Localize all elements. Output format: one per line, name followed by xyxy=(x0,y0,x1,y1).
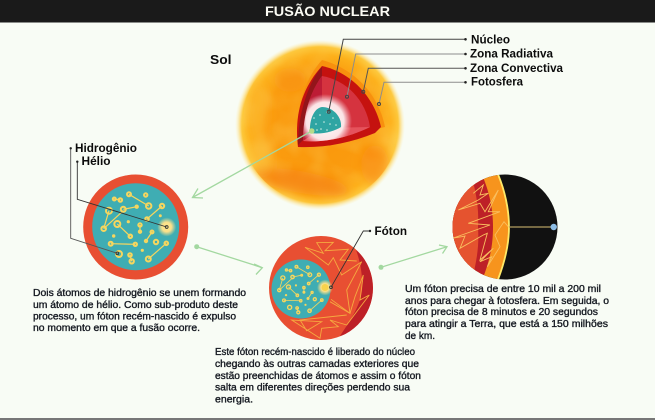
text: surface description: para atingir a Terra, que está a 150 milhões xyxy=(405,318,608,330)
label: Núcleo: Núcleo xyxy=(471,34,510,46)
sun illustration xyxy=(235,40,405,210)
panel: surface circle xyxy=(452,174,558,280)
text: fusion description: processo, um fóton recém-nascido é expulso xyxy=(33,310,236,322)
label: Fóton: Fóton xyxy=(374,226,407,238)
label: Fotosfera: Fotosfera xyxy=(471,76,524,88)
label: Hidrogênio: Hidrogênio xyxy=(75,143,137,155)
text: surface description xyxy=(405,283,609,342)
text: fusion description: no momento em que a fusão ocorre. xyxy=(33,322,200,334)
photon path xyxy=(453,185,508,267)
label: Zona Convectiva: Zona Convectiva xyxy=(470,63,564,75)
text: fusion description: um átomo de hélio. Como sub-produto deste xyxy=(33,299,238,311)
callouts: hydrogen and helium xyxy=(70,147,168,255)
panel: photon bouncing circle xyxy=(269,236,373,340)
text: surface description: de km. xyxy=(405,330,435,342)
text: photon description: Este fóton recém-nascido é liberado do núcleo xyxy=(215,346,415,358)
sun core xyxy=(310,107,341,134)
label: Zona Radiativa: Zona Radiativa xyxy=(470,48,554,60)
text: surface description: fóton precisa de 8 minutos e 20 segundos xyxy=(405,306,598,318)
callout: photon xyxy=(330,230,371,289)
panel: fusion circle xyxy=(83,174,188,280)
label: Sol: Sol xyxy=(210,52,232,67)
text: photon description xyxy=(215,346,421,406)
text: fusion description xyxy=(33,287,246,334)
photon path xyxy=(292,242,369,338)
text: surface description: anos para chegar à fotosfera. Em seguida, o xyxy=(405,295,609,307)
title bar: FUSÃO NUCLEAR xyxy=(265,2,390,19)
text: surface description: Um fóton precisa de entre 10 mil a 200 mil xyxy=(405,283,601,295)
text: photon description: energia. xyxy=(215,394,253,406)
text: photon description: salta em diferentes direções perdendo sua xyxy=(215,382,410,394)
photon glow xyxy=(157,218,176,236)
arrow: photon to surface xyxy=(378,245,447,270)
arrow: sun core to fusion xyxy=(192,128,315,198)
sun cutaway xyxy=(297,60,385,148)
label: Hélio: Hélio xyxy=(82,156,110,168)
bottom rule xyxy=(0,418,655,420)
photon glow xyxy=(317,280,333,296)
text: photon description: estão preenchidas de átomos e assim o fóton xyxy=(215,370,421,382)
icon: earth xyxy=(550,224,557,230)
arrow: fusion to photon xyxy=(194,244,262,274)
earth line xyxy=(509,226,553,228)
title bar xyxy=(0,0,655,22)
text: fusion description: Dois átomos de hidrogênio se unem formando xyxy=(33,287,246,299)
sun leader lines xyxy=(327,38,467,113)
text: photon description: chegando às outras camadas exteriores que xyxy=(215,358,419,370)
